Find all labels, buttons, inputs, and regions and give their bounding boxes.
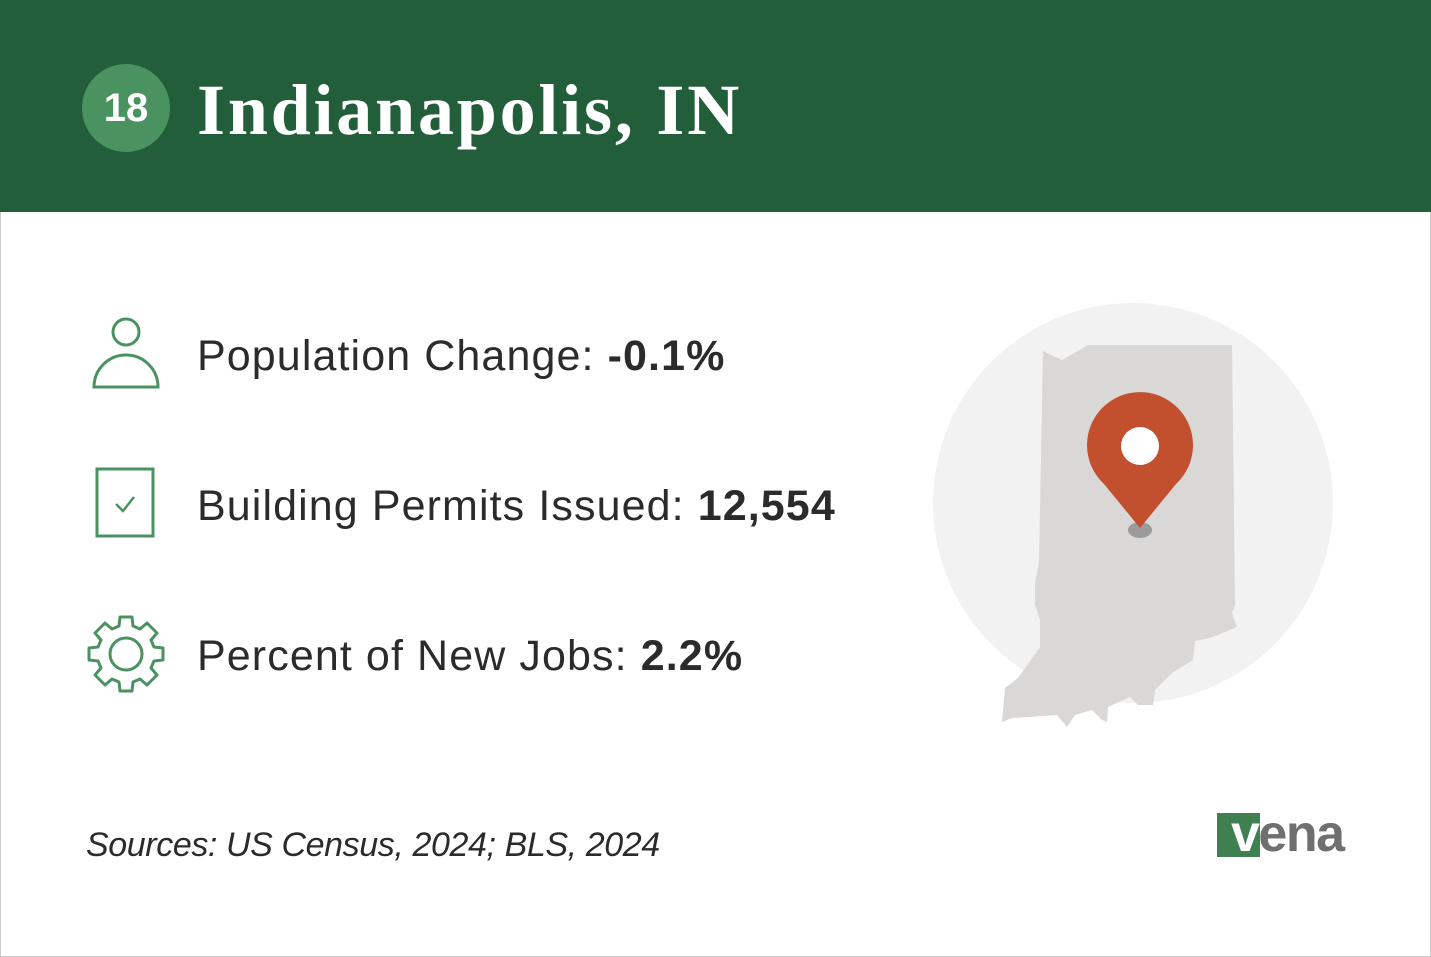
rank badge xyxy=(82,64,170,152)
map: Indiana xyxy=(1002,345,1237,727)
stat: population: Population Change: -0.1% xyxy=(197,332,725,380)
icon: person xyxy=(92,318,160,388)
header band xyxy=(0,0,1431,212)
icon: gear xyxy=(88,616,164,692)
icon: location pin xyxy=(1087,392,1193,538)
stat: permits: Building Permits Issued: 12,554 xyxy=(197,482,836,530)
stat: jobs: Percent of New Jobs: 2.2% xyxy=(197,632,743,680)
logo: vena: vena xyxy=(1231,805,1344,863)
sources: Sources: US Census, 2024; BLS, 2024 xyxy=(86,826,660,864)
icon: checkbox xyxy=(96,468,154,538)
rank badge: 18 xyxy=(104,86,148,130)
title: Indianapolis, IN xyxy=(197,70,742,150)
